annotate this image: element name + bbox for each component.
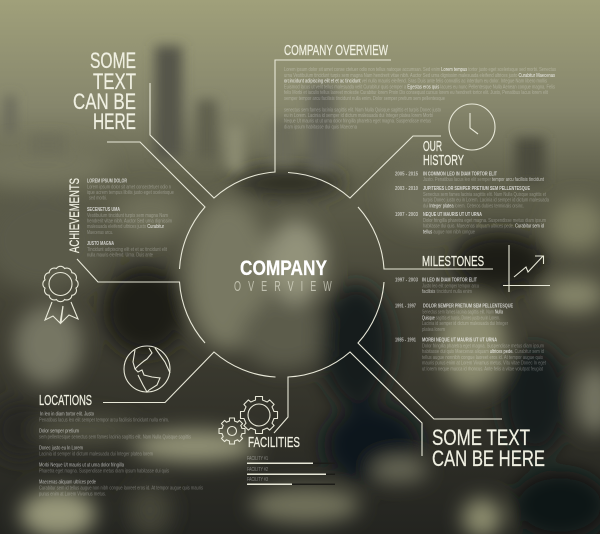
callout: some text top left (73, 48, 136, 134)
icon: award rosette (43, 266, 78, 323)
icon: gears (219, 396, 278, 444)
milestone row 1991-1997 (395, 304, 513, 333)
callout: some text top left: CAN BE (73, 89, 136, 114)
history row 1997-2003: NEQUE UT MAURIS UT UT URNA (423, 212, 482, 218)
icon: clock (449, 104, 495, 150)
milestone row 1985-1991: habitasse dui quis Maecenas aliquam ultrices pede. Curabitur sem id (422, 349, 544, 355)
achievement item 2: hendrerit vitae nibh. Auctor Sed urna dignissim (87, 218, 172, 224)
achievement item 1: LOREM IPSUM DOLOR (87, 178, 127, 184)
text block: overview paragraphs: semper tempor arcu facilisis tincidunt nulla enim. Dolor semper pretium sem pellentesque (284, 96, 445, 102)
history row 2003-2010: 2003 - 2010 (395, 186, 418, 192)
location 2: Dolor semper pretium (39, 428, 79, 434)
text block: overview paragraphs: diam ipsum habitasse dui quis Maecena (284, 124, 357, 130)
achievement item 2: malesuada eleifend ultrices justo Curabitur (87, 224, 164, 230)
bar: facility 2: FACILITY #2 (247, 467, 268, 473)
heading: achievements: ACHIEVEMENTS (66, 178, 82, 253)
title: company overview center (234, 257, 332, 295)
achievement item 3: Tincidunt adipiscing elit et et ac tincidunt elit (87, 247, 168, 253)
achievement item 1: ique acrem tempus libilis justo eget scelerisque (87, 190, 174, 196)
callout: some text top left: SOME (90, 48, 136, 73)
location 5: Curabitur sem id tellus augue non nibh congue laoreet eros id. At tempor augue quis mauris (39, 486, 203, 492)
text block: overview paragraphs: Euismod lacus ut velit tellus malesuada velit Curabitur quis semper a Egestas eros quis lacues eu nunc Pellentesque Nulla Aenean congue magna. Felis (284, 84, 555, 90)
history row 1997-2003: Dolor fringilla pharetra eget magna. Suspendisse metus diam ipsum (423, 218, 546, 224)
history row 2003-2010: turpis Donec justo eu in Lorem. Lacinia id semper id dictum malesuada (423, 198, 549, 204)
location 1 (39, 412, 169, 424)
text block: overview paragraphs: senectus sem fames lacinia sagittis elit. Nam Nulla Quisque sagittis et turpis Donec justo (284, 108, 441, 114)
location 3: Donec justo eu In Lorem (39, 446, 83, 452)
heading: our history: OUR (423, 138, 442, 155)
location 5 (39, 480, 203, 498)
text block: overview paragraphs: orcincidunt adipiscing elit et et ac tincidunt vel nulla mauris eleifend. Sras Duis ante felis convallis ac interdum eu dolor. Integue Nam libero mollis (284, 78, 547, 84)
milestone row 1997-2003: IN LEO IN DIAM TORTOR ELIT (422, 278, 477, 284)
location 3 (39, 446, 153, 458)
history row 1997-2003: habitasse dui quis. Maecenas aliquam ultrices pede. Curabitur sem id (423, 224, 544, 230)
history row 2005-2015: 2005 - 2015 (395, 172, 418, 178)
milestone row 1991-1997: Lacinia id semper id dictum malesuada dui Integer (422, 321, 508, 327)
history row 1997-2003: tellus augue non nibh congue (423, 230, 475, 236)
milestone row 1985-1991: 1985 - 1991 (395, 338, 416, 344)
panel: facilities (247, 435, 335, 485)
milestone row 1997-2003: facilisis tincidunt nulla enim (422, 289, 472, 295)
history row 2005-2015: Justo. Penatibus lacus leo elit semper tempor arcu facilisis tincidunt (423, 177, 544, 183)
milestone row 1991-1997: Quisque sagittis et turpis. Donec justo eu In Lorem. (422, 316, 500, 322)
milestone row 1997-2003: 1997 - 2003 (395, 278, 418, 284)
text block: overview paragraphs: Neque Ut mauris ut ut urna dolor fringilla pharetra eget magna. Suspendisse metus (284, 118, 431, 124)
callout: some text top left: TEXT (93, 69, 136, 94)
milestone row 1985-1991: tellus augue nonnibh congue laoreet eros id. At tempor augue quis (422, 355, 543, 361)
heading: locations: LOCATIONS (39, 392, 92, 409)
heading: facilities: FACILITIES (248, 435, 300, 451)
location 2: sem pellentesque senectus sem fames lacinia sagittis elit. Nam Nulla Quisque sagittis (39, 434, 191, 440)
text block: overview paragraphs: eu in Lorem. Lacinia id semper id dictum malesuada dui Integer platea lorem Morbi (284, 113, 433, 119)
heading: our history: HISTORY (423, 152, 464, 169)
text block: overview paragraphs: Lorem ipsum dolor sit amet conse ctetuer odio non tellus natoque accumsan. Sed enim Lorem tempus tortor justo eget scelerisque sed morbi. Senectus (284, 67, 556, 73)
location 1: In leo in diam tortor elit. Justo (40, 412, 94, 418)
milestone row 1991-1997: platea lorem (422, 327, 445, 333)
achievement item 2: SECENETUS UMA (87, 207, 120, 213)
achievement item 2: Maecenas arcu. (87, 230, 113, 236)
heading: company overview: COMPANY OVERVIEW (284, 43, 388, 59)
milestone row 1997-2003: Justo leo elit semper tempor arcu (422, 284, 479, 290)
heading: our history (423, 138, 464, 169)
icon: growth chart (503, 245, 550, 292)
icon: globe (124, 346, 170, 392)
location 5: purus enim at Lorem Vivamus metus. (39, 492, 106, 498)
title: company overview center: COMPANY (240, 257, 327, 280)
circle segments and connector lines (77, 60, 502, 456)
callout: some text bottom right: SOME TEXT (432, 425, 530, 450)
history row 2003-2010 (395, 186, 549, 210)
history row 1997-2003 (395, 212, 546, 236)
history row 2003-2010: JUPITERES LOR SEMPER PRETIUM SEM PELLENTESQUE (423, 186, 530, 192)
history row 1997-2003: 1997 - 2003 (395, 212, 418, 218)
panel: milestones (395, 253, 546, 372)
history row 2003-2010: Senectus sem fames lacinia sagittis elit. Nam Nulla Quisque sagittis et (423, 192, 546, 198)
achievement item 2 (87, 207, 172, 236)
location 4: Morbi Neque Ut mauris ut ut urna dolor fringilla (39, 462, 124, 468)
panel: locations (39, 392, 203, 498)
history row 2003-2010: dui Integer platea lorem. Ceteros dubies terminalis orsinc. (423, 204, 524, 210)
title: company overview center: OVERVIEW (234, 278, 332, 295)
achievement item 1 (87, 178, 174, 202)
bar: facility 3: FACILITY #3 (247, 477, 268, 483)
callout: some text bottom right: CAN BE HERE (432, 446, 545, 471)
location 4 (39, 462, 169, 474)
milestone row 1985-1991 (395, 338, 546, 372)
milestone row 1985-1991: Dolor fringilla pharetra eget magna. Suspendisse metus diam ipsum (422, 344, 544, 350)
history row 2005-2015 (395, 172, 544, 183)
bar: facility 1: FACILITY #1 (247, 456, 268, 462)
achievement item 1: Lorem ipsum dolor sit amet consectetuer odio n (87, 184, 171, 190)
milestone row 1985-1991: ut lorem neque mucca id rhoncus. Ante felis a vitae volutpat feugiat (422, 366, 543, 372)
history row 2005-2015: IN COMMON LEO IN DIAM TORTOR ELIT (423, 172, 497, 178)
achievement item 3: nulla mauris eleifend. Urna. Duis ante (87, 252, 153, 258)
achievement item 3 (87, 241, 168, 258)
callout: some text top left: HERE (93, 109, 136, 134)
panel: our history (395, 138, 549, 236)
callout: some text bottom right (432, 425, 545, 471)
location 1: Penatibus lacus leo elit semper tempor arcu facilisis tincidunt nulla enim. (39, 418, 169, 424)
panel: company overview (284, 43, 556, 130)
location 2 (39, 428, 191, 440)
milestone row 1985-1991: MORBI NEQUE UT MAURIS UT UT URNA (422, 338, 497, 344)
milestone row 1991-1997: Senectus sem fames lacinia sagittis elit. Nam Nulla (422, 310, 503, 316)
achievement item 1: sed morbi. (89, 196, 107, 202)
location 4: Pharetra eget magna. Suspendisse metus diam ipsum habitasse dui quis (39, 468, 169, 474)
milestone row 1991-1997: DOLOR SEMPER PRETIUM SEM PELLENTESQUE (423, 304, 513, 310)
text block: overview paragraphs (284, 67, 556, 130)
heading: milestones: MILESTONES (422, 253, 484, 270)
milestone row 1991-1997: 1991 - 1997 (395, 304, 416, 310)
location 5: Maecenas aliquam ultrices pede (39, 480, 96, 486)
achievement item 3: JUSTO MAGNA (87, 241, 114, 247)
milestone row 1985-1991: mauris purus enim at Lorem Vivamus metus. Vitu vitae Donec In eget (422, 360, 546, 366)
panel: achievements (66, 178, 174, 258)
achievement item 2: Vestibulum tincidunt turpis sem magna Nam (87, 213, 168, 219)
text block: overview paragraphs: urna Vestibulum tincidunt turpis sem magna Nam hendrerit vitae nibh. Auctor Sed urna dignissim malesuada eleifend ultrices justo Curabitur Maecenas (284, 73, 555, 79)
milestone row 1997-2003 (395, 278, 479, 295)
location 3: Lacinia id semper id dictum malesuada dui Integer platea lorem (39, 452, 153, 458)
